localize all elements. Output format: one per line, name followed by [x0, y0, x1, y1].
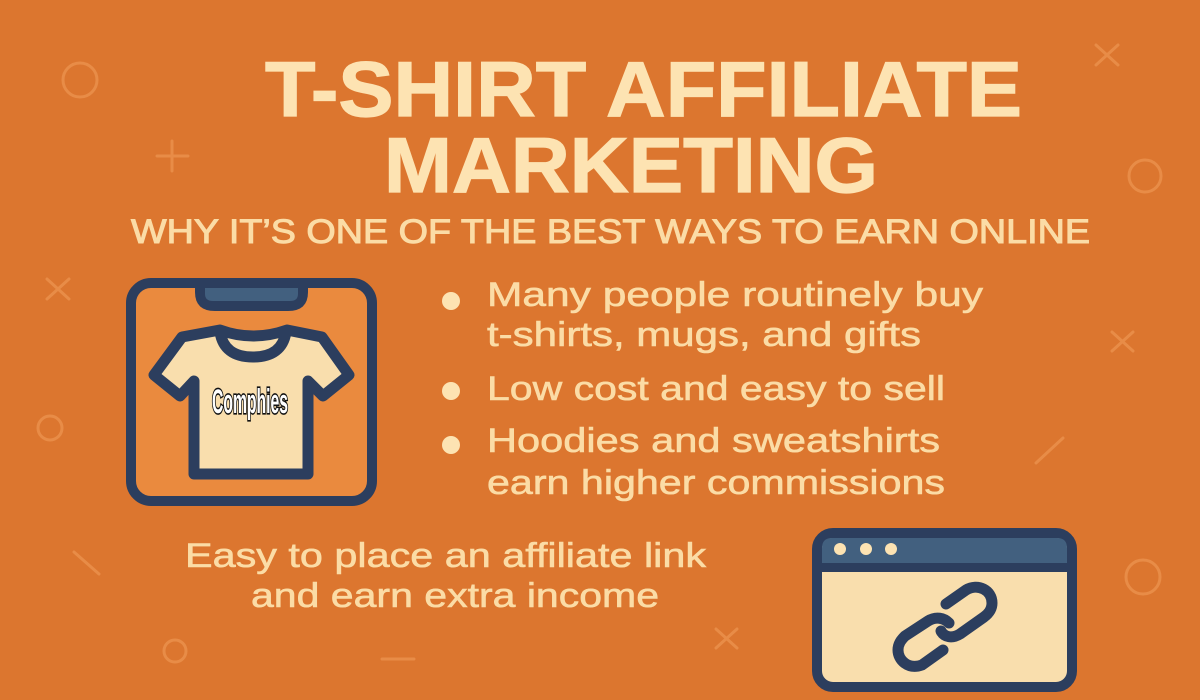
- affiliate link caption: Easy to place an affiliate link: [185, 537, 707, 575]
- title: [265, 45, 1022, 209]
- title: MARKETING: [384, 121, 878, 209]
- bullet list: t-shirts, mugs, and gifts: [487, 316, 921, 354]
- bullet list: [442, 276, 983, 502]
- subtitle: WHY IT’S ONE OF THE BEST WAYS TO EARN ONLINE: [131, 213, 1090, 251]
- title: T-SHIRT AFFILIATE: [265, 45, 1022, 133]
- icon: browser window with link: [817, 533, 1072, 687]
- affiliate link caption: and earn extra income: [251, 577, 659, 615]
- bullet list: Low cost and easy to sell: [487, 370, 945, 408]
- bullet list: Many people routinely buy: [487, 276, 983, 314]
- icon: t-shirt card: [131, 283, 372, 501]
- affiliate link caption: [185, 537, 707, 615]
- icon: t-shirt card: Comphies: [212, 383, 288, 421]
- bullet list: earn higher commissions: [487, 464, 945, 502]
- bullet list: Hoodies and sweatshirts: [487, 422, 940, 460]
